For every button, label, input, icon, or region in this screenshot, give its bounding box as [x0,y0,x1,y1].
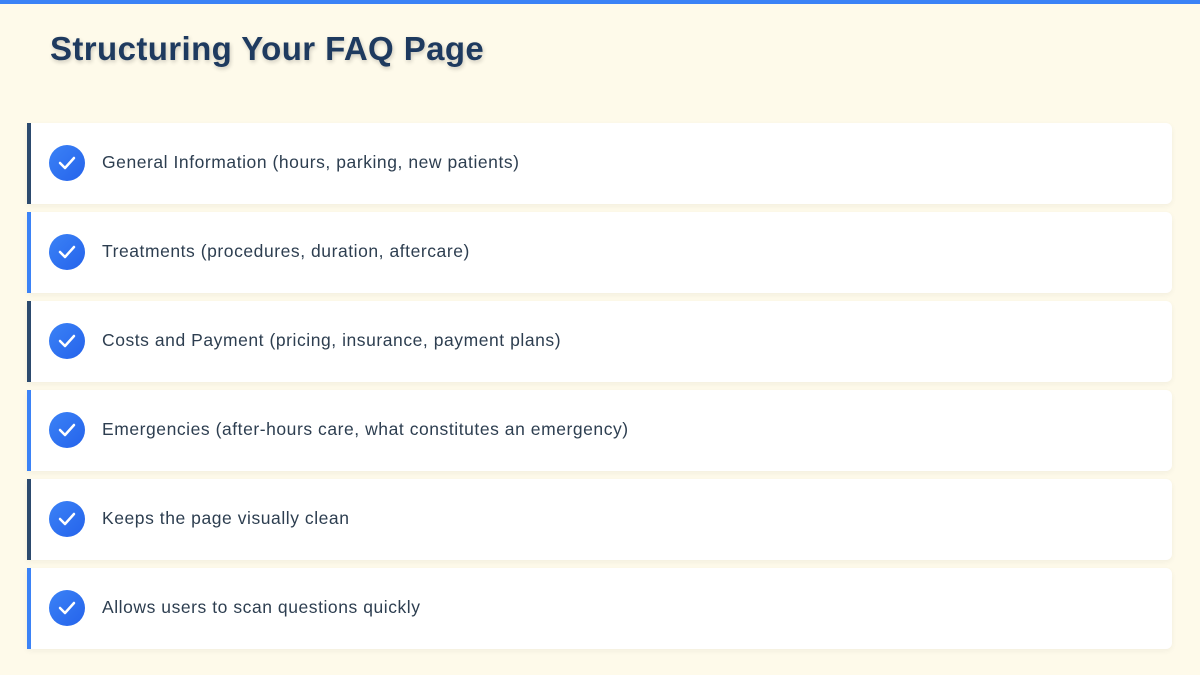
text: Costs and Payment (pricing, insurance, payment plans) [102,330,561,350]
text: Emergencies (after-hours care, what constitutes an emergency) [102,419,629,439]
icon: check [49,234,85,270]
card: costs [27,301,1172,382]
card: treatments [27,212,1172,293]
icon: check [49,501,85,537]
card: general information [27,123,1172,204]
text: General Information (hours, parking, new patients) [102,152,520,172]
text: Treatments (procedures, duration, aftercare) [102,241,470,261]
icon: check [49,412,85,448]
card: scan [27,568,1172,649]
icon: check [49,590,85,626]
text: Allows users to scan questions quickly [102,597,421,617]
card: emergencies [27,390,1172,471]
text: Keeps the page visually clean [102,508,350,528]
title: Structuring Your FAQ Page [50,30,484,67]
card: clean [27,479,1172,560]
icon: check [49,145,85,181]
icon: check [49,323,85,359]
